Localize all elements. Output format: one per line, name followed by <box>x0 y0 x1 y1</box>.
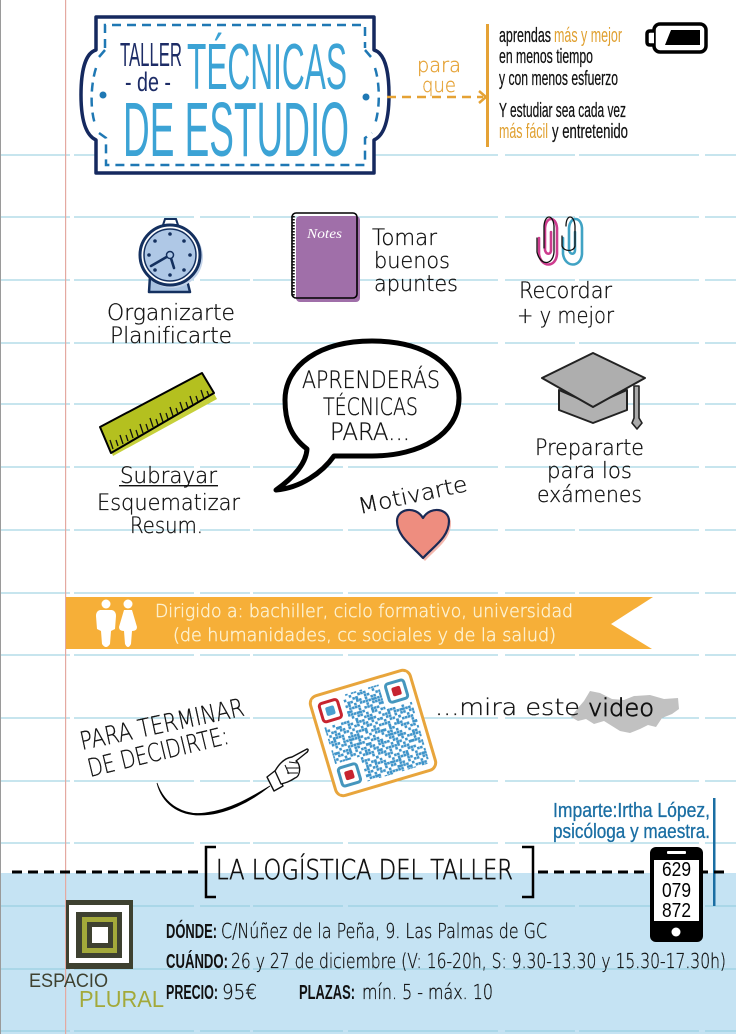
text: motivarte: Motivarte <box>356 472 470 520</box>
text: subrayar <box>97 464 241 539</box>
gray video blob <box>571 691 679 733</box>
title badge <box>81 17 389 173</box>
qr finder: blue top <box>377 672 415 709</box>
text: imparte: Imparte:Irtha López, <box>553 800 710 822</box>
text: tomar buenos apuntes: buenos <box>374 249 450 274</box>
text: organizarte: Organizarte <box>107 301 235 326</box>
text: recordar: + y mejor <box>517 304 615 329</box>
icon: phone: 872 <box>662 900 691 922</box>
qr finder: blue bottom <box>331 757 369 794</box>
benefits text: más y mejor <box>554 25 622 47</box>
icon: pointing hand <box>267 749 308 791</box>
icon: phone <box>650 847 703 942</box>
title badge: TÉCNICAS <box>187 30 347 103</box>
logistics details: PRECIO: <box>166 982 218 1004</box>
curved arrow line <box>157 783 270 815</box>
text: mira este video: video <box>588 694 654 722</box>
speech bubble: PARA... <box>330 418 410 446</box>
title badge: DE ESTUDIO <box>123 87 349 173</box>
blue logistics background <box>0 873 736 1034</box>
icon: graduation cap <box>542 353 645 429</box>
icon: ruler <box>100 373 217 456</box>
icon: heart <box>397 510 451 561</box>
icon: people <box>96 600 137 647</box>
speech bubble: APRENDERÁS <box>302 365 440 394</box>
text: imparte <box>553 800 710 843</box>
audience banner <box>66 597 653 649</box>
notebook margin line <box>65 0 66 1034</box>
benefits text: y con menos esfuerzo <box>499 68 618 90</box>
logistics details: CUÁNDO: <box>166 950 228 973</box>
text: tomar buenos apuntes: Tomar <box>372 226 438 251</box>
text: preparate: exámenes <box>537 483 642 508</box>
text: mira este video <box>435 694 654 722</box>
text: recordar <box>517 279 615 329</box>
qr finder: red <box>312 691 349 729</box>
text: subrayar: Resum. <box>130 514 203 539</box>
text: tomar buenos apuntes: apuntes <box>374 272 458 297</box>
benefits text: en menos tiempo <box>499 46 593 68</box>
icon: notebook: Notes <box>306 227 343 242</box>
text: para terminar de decidirte: PARA TERMINAR <box>77 693 247 756</box>
icon: clock <box>140 219 203 292</box>
text: preparate: para los <box>547 459 632 484</box>
logistics details <box>166 919 726 1004</box>
text: para terminar de decidirte <box>77 693 247 783</box>
logistics details: C/Núñez de la Peña, 9. Las Palmas de GC <box>221 919 547 943</box>
speech bubble: TÉCNICAS <box>323 392 418 421</box>
text: tomar buenos apuntes <box>372 226 458 297</box>
arrow: para que: para <box>417 53 461 77</box>
logistics details: 95€ <box>222 980 257 1004</box>
audience banner: (de humanidades, cc sociales y de la salud) <box>173 625 556 646</box>
logistics details: DÓNDE: <box>166 919 217 943</box>
icon: notebook <box>292 213 360 302</box>
benefits text: aprendas <box>499 25 551 47</box>
logo: espacio plural <box>29 900 164 1012</box>
text: preparate <box>535 436 644 508</box>
text: subrayar: Subrayar <box>120 464 218 489</box>
text: recordar: Recordar <box>519 279 613 304</box>
arrow: para que <box>387 53 486 103</box>
speech bubble <box>276 341 459 490</box>
benefits text <box>499 25 628 143</box>
text: preparate: Prepararte <box>535 436 644 461</box>
benefits text: y entretenido <box>552 121 628 143</box>
icon: battery <box>647 24 706 52</box>
text: organizarte <box>107 301 235 349</box>
page edge <box>0 0 1 1034</box>
audience banner: Dirigido a: bachiller, ciclo formativo, universidad <box>155 601 573 622</box>
title badge: - de - <box>125 67 171 97</box>
vertical divider <box>486 24 489 147</box>
text: mira este video: ...mira este <box>435 695 580 721</box>
text: subrayar: Esquematizar <box>97 491 241 516</box>
imparte rule <box>713 798 716 906</box>
benefits text: Y estudiar sea cada vez <box>499 100 626 122</box>
title badge: TALLER <box>120 36 182 73</box>
text: imparte: psicóloga y maestra. <box>553 821 710 843</box>
section heading: logística <box>12 847 728 897</box>
text: organizarte: Planificarte <box>110 324 232 349</box>
icon: paper clips <box>537 217 582 264</box>
text: para terminar de decidirte: DE DECIDIRTE: <box>85 721 231 783</box>
logistics details: PLAZAS: <box>299 982 355 1004</box>
logo: espacio plural: ESPACIO <box>29 971 108 992</box>
icon: phone: 629 <box>662 859 691 881</box>
benefits text: más fácil <box>499 121 548 143</box>
icon: phone: 079 <box>662 880 691 902</box>
QR code <box>308 668 438 798</box>
logo: espacio plural: PLURAL <box>79 986 164 1012</box>
section heading: logística: LA LOGÍSTICA DEL TALLER <box>216 852 513 886</box>
arrow: para que: que <box>422 73 456 97</box>
logistics details: mín. 5 - máx. 10 <box>362 980 493 1004</box>
